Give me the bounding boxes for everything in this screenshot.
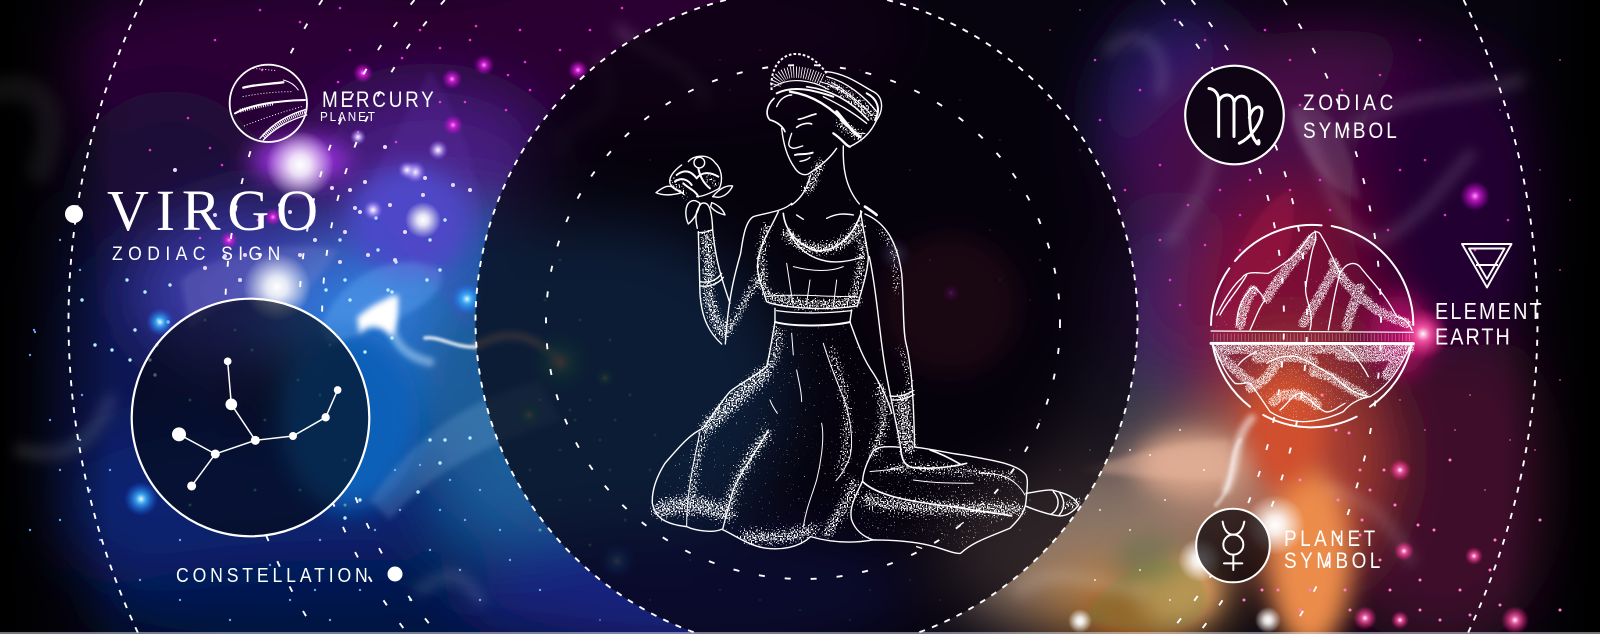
virgo glyph [1209,89,1262,144]
subtitle: zodiac sign: ZODIAC SIGN [112,242,280,264]
icon: earth element triangle [1462,244,1512,288]
face [782,114,837,175]
left arm [698,203,792,344]
Virgo woman illustration [652,54,1079,553]
icon: zodiac symbol [1185,66,1284,164]
figure line art [652,54,1079,553]
label: planet: PLANET [320,109,375,124]
heading: Mercury: MERCURY [322,88,434,112]
mercury glyph [1223,522,1244,570]
label: constellation: CONSTELLATION [176,565,368,587]
translucent nebula sheets [180,70,1360,630]
label: planet symbol: PLANET [1284,527,1376,551]
icon: planet symbol [1196,509,1270,582]
neck and shoulders [792,146,859,205]
label: zodiac symbol [1303,91,1397,143]
label: planet symbol [1284,527,1380,573]
label: planet symbol: SYMBOL [1284,549,1380,573]
mountain stipple [1213,231,1412,422]
label: element earth [1435,299,1542,350]
icon: earth mountain circle [1211,225,1413,427]
label: element earth: ELEMENT [1435,299,1542,324]
rose [656,156,733,229]
figure stipple shading [652,83,1077,553]
icon: Mercury planet [230,65,307,142]
right arm [865,214,915,447]
dress bodice [757,207,877,325]
pointer dot: constellation [388,566,402,582]
label: zodiac symbol: SYMBOL [1303,119,1397,143]
label: zodiac symbol: ZODIAC [1303,91,1393,115]
label: element earth: EARTH [1435,324,1510,350]
central dark circle [476,0,1137,634]
virgo constellation lines and stars [172,357,341,490]
mountain outlines [1211,231,1413,422]
constellation circle [132,299,369,536]
skirt [652,322,1027,553]
foot [1025,490,1079,516]
tiara [771,54,833,97]
pointer dot: Virgo [65,205,83,223]
title: VIRGO: VIRGO [107,178,318,243]
hair [767,72,882,147]
